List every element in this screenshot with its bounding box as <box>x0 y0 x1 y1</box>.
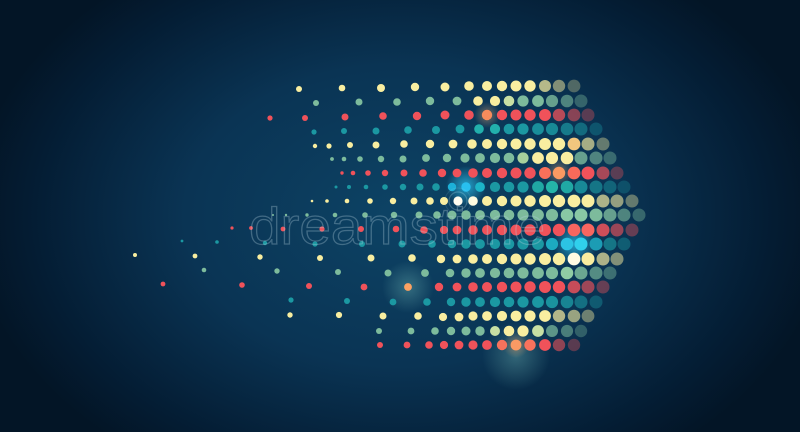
row 8: teal dots <box>334 180 630 194</box>
row 1: yellow dots <box>296 80 580 92</box>
row 15: red dots <box>161 280 610 294</box>
watermark text: dreamstime <box>249 198 545 256</box>
row 3: red dots <box>267 108 594 122</box>
row 5: yellow dots <box>313 138 610 150</box>
row 16: teal dots <box>288 296 602 308</box>
row 6: green dots <box>330 152 616 164</box>
row 4: teal dots <box>311 122 602 136</box>
row 19: red dots <box>377 339 580 351</box>
row 14: green dots <box>202 266 616 280</box>
ring flare around white dot <box>445 188 471 214</box>
row 2: green dots <box>313 94 588 108</box>
row 12: teal dots <box>181 238 630 250</box>
row 13: yellow dots <box>133 252 624 266</box>
row 9: yellow dots <box>311 194 638 208</box>
row 18: green dots <box>376 325 587 337</box>
row 17: yellow dots <box>287 310 594 322</box>
row 11: red dots <box>230 224 638 236</box>
lens glows <box>382 102 597 390</box>
row 10: green dots <box>272 208 646 222</box>
row 7: red dots <box>340 166 624 180</box>
